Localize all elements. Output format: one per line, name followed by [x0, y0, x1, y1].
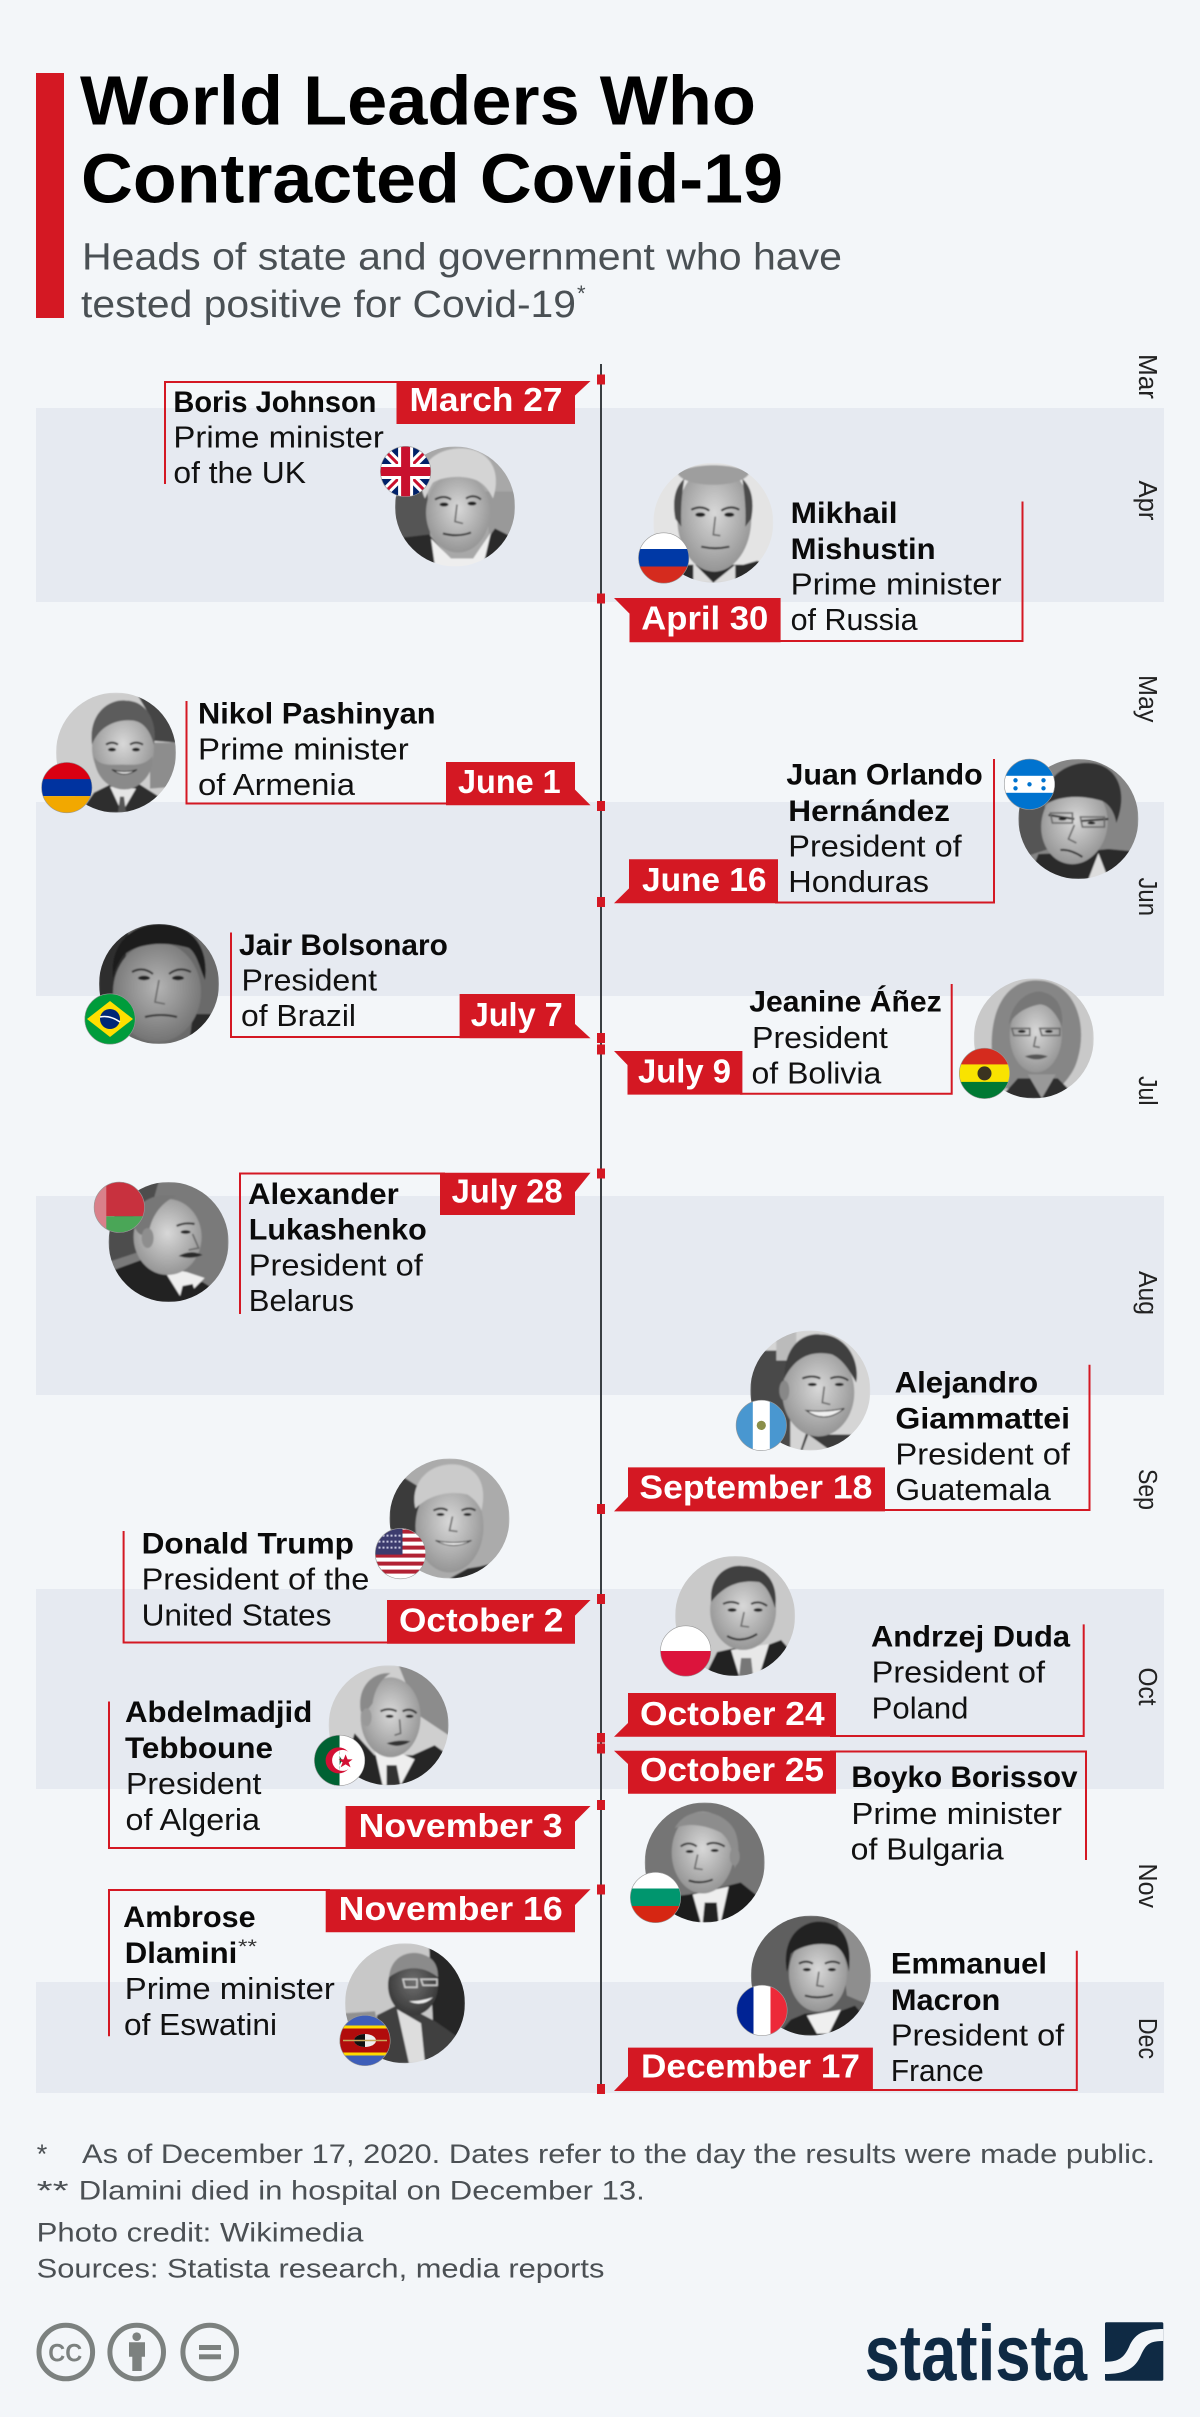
- name and role: [239, 929, 448, 1033]
- name and role: Jeanine Áñez: [749, 985, 942, 1019]
- flag: Brazil: [84, 993, 136, 1045]
- title accent bar: [36, 73, 64, 318]
- name and role: Guatemala: [895, 1473, 1051, 1507]
- photo: [653, 463, 773, 583]
- date label: October 2: [399, 1602, 563, 1639]
- name and role: [123, 1901, 335, 2042]
- name and role: Hernández: [788, 795, 950, 828]
- date label: [614, 1751, 836, 1794]
- entry: Jair Bolsonaro: [84, 924, 590, 1045]
- date label: July 7: [471, 996, 563, 1033]
- name and role: President: [242, 964, 378, 998]
- entry: Emmanuel Macron: [614, 1916, 1077, 2091]
- date label: November 3: [359, 1807, 563, 1844]
- flag: UK: [380, 446, 432, 498]
- name and role: [198, 698, 436, 802]
- subtitle: [81, 236, 842, 326]
- name and role: Jair Bolsonaro: [239, 929, 448, 962]
- name and role: Prime minister: [198, 732, 409, 766]
- connector: [740, 984, 952, 1094]
- name and role: of the UK: [173, 456, 306, 490]
- name and role: Ambrose: [123, 1901, 256, 1934]
- date label: September 18: [639, 1469, 872, 1506]
- icon: creative commons: CC: [48, 2340, 82, 2368]
- name and role: France: [891, 2054, 984, 2088]
- entry: Donald Trump: [124, 1458, 590, 1644]
- entry: Nikol Pashinyan: [41, 693, 591, 814]
- name and role: Nikol Pashinyan: [198, 698, 436, 731]
- date label: October 24: [640, 1695, 825, 1732]
- flag: Honduras: [1004, 758, 1056, 810]
- entry: Alexander Lukashenko: [93, 1173, 591, 1318]
- footnotes: Dlamini died in hospital on December 13.: [79, 2175, 645, 2205]
- name and role: [248, 1178, 427, 1318]
- flag: Poland: [660, 1625, 712, 1677]
- footnotes: *: [37, 2139, 48, 2169]
- connector: [109, 1890, 330, 2036]
- flag: Guatemala: [735, 1399, 787, 1451]
- photo: [750, 1330, 870, 1450]
- date label: July 9: [638, 1052, 731, 1089]
- footnotes: [37, 2139, 1155, 2205]
- source credits: [37, 2218, 604, 2283]
- date label: [326, 1889, 590, 1932]
- name and role: of Armenia: [198, 768, 355, 802]
- name and role: Macron: [891, 1984, 1000, 2017]
- date label: November 16: [339, 1890, 563, 1927]
- subtitle: *: [577, 281, 586, 306]
- month labels: [1133, 354, 1161, 2059]
- photo: [675, 1556, 795, 1676]
- name and role: Poland: [872, 1691, 968, 1725]
- name and role: President of: [895, 1437, 1071, 1471]
- date label: April 30: [641, 600, 768, 637]
- name and role: of Algeria: [126, 1803, 260, 1837]
- connector: [830, 1624, 1084, 1736]
- flag: Russia: [638, 532, 690, 584]
- name and role: of Brazil: [241, 999, 356, 1033]
- connector: [870, 1951, 1077, 2090]
- flag: Algeria: [314, 1734, 366, 1786]
- icon: attribution: [110, 2325, 164, 2379]
- entry: Mikhail Mishustin: [614, 463, 1022, 642]
- footnotes: **: [37, 2175, 69, 2205]
- month bands: [36, 408, 1164, 2093]
- name and role: [895, 1366, 1071, 1507]
- connector: [165, 382, 400, 484]
- name and role: Prime minister: [851, 1797, 1062, 1831]
- month labels: Jun: [1133, 878, 1161, 916]
- date label: March 27: [410, 381, 562, 418]
- flag: Belarus: [93, 1181, 145, 1234]
- photo: [1018, 759, 1138, 879]
- name and role: [851, 1761, 1078, 1867]
- date label: [614, 1693, 836, 1737]
- flag: USA: [374, 1528, 426, 1580]
- name and role: [791, 497, 1002, 637]
- flag: Bulgaria: [630, 1872, 682, 1924]
- entry: Juan Orlando Hernández: [614, 758, 1138, 903]
- photo: [390, 1458, 510, 1578]
- name and role: [871, 1620, 1070, 1725]
- date label: [346, 1806, 590, 1849]
- name and role: President of: [891, 2019, 1065, 2053]
- date label: [614, 1051, 742, 1095]
- connector: [775, 759, 994, 902]
- footnotes: As of December 17, 2020. Dates refer to the day the results were made public.: [82, 2139, 1155, 2169]
- name and role: Boyko Borissov: [851, 1761, 1078, 1794]
- month labels: Nov: [1133, 1864, 1161, 1908]
- photo: [109, 1182, 229, 1302]
- name and role: Belarus: [249, 1284, 354, 1318]
- photo: [345, 1943, 465, 2063]
- name and role: of Bolivia: [752, 1056, 881, 1090]
- connector: [880, 1365, 1090, 1510]
- photo: [56, 693, 176, 813]
- month labels: Oct: [1133, 1668, 1161, 1706]
- name and role: [749, 985, 942, 1090]
- name and role: President of: [872, 1655, 1046, 1689]
- connector: [109, 1702, 350, 1848]
- timeline axis: [600, 364, 602, 2094]
- name and role: Boris Johnson: [173, 386, 376, 419]
- name and role: Mikhail: [791, 497, 898, 530]
- month labels: Sep: [1133, 1469, 1161, 1510]
- name and role: Giammattei: [895, 1403, 1070, 1436]
- entry: Boris Johnson: [165, 381, 590, 566]
- subtitle: Heads of state and government who have: [82, 236, 842, 278]
- title: [80, 62, 783, 218]
- name and role: [142, 1528, 369, 1633]
- photo: [395, 446, 515, 566]
- connector: [775, 502, 1022, 641]
- name and role: President of the: [142, 1563, 369, 1597]
- connector: [124, 1531, 392, 1642]
- title: World Leaders Who: [80, 62, 756, 140]
- name and role: Prime minister: [173, 421, 384, 455]
- month labels: Dec: [1133, 2018, 1161, 2059]
- name and role: Honduras: [788, 865, 929, 899]
- date label: [460, 994, 590, 1038]
- date label: December 17: [641, 2048, 860, 2084]
- name and role: [891, 1948, 1065, 2088]
- name and role: of Russia: [791, 603, 918, 637]
- photo: [645, 1802, 765, 1922]
- month labels: Aug: [1133, 1271, 1161, 1315]
- name and role: **: [238, 1937, 258, 1958]
- icon: no derivatives: [183, 2325, 236, 2379]
- name and role: Mishustin: [791, 533, 936, 566]
- icon: creative commons: [39, 2325, 93, 2379]
- name and role: Tebboune: [125, 1732, 273, 1765]
- date label: October 25: [640, 1751, 824, 1788]
- name and role: [786, 759, 983, 899]
- date label: [614, 2048, 873, 2091]
- name and role: United States: [142, 1599, 331, 1633]
- date label: June 1: [458, 763, 561, 800]
- photo: [329, 1665, 449, 1785]
- entry: Ambrose Dlamini: [109, 1889, 590, 2066]
- entry: Boyko Borissov: [614, 1751, 1086, 1924]
- month labels: Mar: [1133, 354, 1161, 400]
- source credits: Photo credit: Wikimedia: [37, 2218, 365, 2248]
- date label: [440, 1173, 590, 1215]
- name and role: President: [126, 1767, 262, 1801]
- connector: [231, 932, 465, 1037]
- entry: Abdelmadjid Tebboune: [109, 1665, 590, 1849]
- name and role: President: [752, 1021, 888, 1055]
- timeline ticks: [597, 374, 605, 2094]
- name and role: [173, 386, 384, 490]
- name and role: Andrzej Duda: [871, 1620, 1070, 1654]
- entry: Jeanine Áñez: [614, 978, 1094, 1100]
- date label: July 28: [452, 1173, 563, 1210]
- title: Contracted Covid-19: [81, 140, 783, 218]
- photo: [974, 978, 1094, 1098]
- name and role: Prime minister: [791, 568, 1002, 602]
- date label: [614, 859, 778, 903]
- date label: [614, 598, 781, 642]
- name and role: of Bulgaria: [851, 1833, 1004, 1867]
- connector: [240, 1174, 445, 1314]
- month labels: Apr: [1133, 480, 1161, 521]
- date label: [446, 762, 590, 805]
- name and role: Lukashenko: [249, 1214, 427, 1247]
- name and role: Juan Orlando: [786, 759, 983, 792]
- connector: [186, 701, 450, 804]
- date label: [387, 1600, 590, 1644]
- month labels: Jul: [1133, 1076, 1161, 1106]
- date label: [614, 1467, 885, 1511]
- connector: [830, 1752, 1086, 1860]
- entry: Alejandro Giammattei: [614, 1330, 1090, 1511]
- name and role: President of: [249, 1248, 423, 1282]
- source credits: Sources: Statista research, media reports: [37, 2253, 604, 2283]
- flag: Bolivia: [958, 1047, 1010, 1100]
- name and role: Dlamini: [125, 1937, 237, 1970]
- date label: [396, 381, 590, 424]
- flag: France: [736, 1984, 788, 2036]
- flag: Eswatini: [339, 2014, 391, 2066]
- month labels: May: [1133, 675, 1161, 723]
- date label: June 16: [642, 861, 766, 898]
- name and role: President of: [788, 830, 962, 864]
- flag: Armenia: [41, 762, 93, 814]
- name and role: of Eswatini: [124, 2008, 277, 2042]
- name and role: Prime minister: [125, 1972, 335, 2006]
- name and role: [125, 1696, 312, 1837]
- name and role: Emmanuel: [891, 1948, 1047, 1981]
- name and role: Donald Trump: [142, 1528, 354, 1561]
- photo: [99, 924, 219, 1044]
- photo: [751, 1916, 871, 2036]
- entry: Andrzej Duda: [614, 1556, 1084, 1737]
- name and role: Alexander: [248, 1178, 399, 1211]
- name and role: Alejandro: [895, 1366, 1038, 1399]
- subtitle: tested positive for Covid-19: [81, 284, 576, 326]
- statista logo: statista: [865, 2308, 1088, 2397]
- name and role: Abdelmadjid: [125, 1696, 312, 1729]
